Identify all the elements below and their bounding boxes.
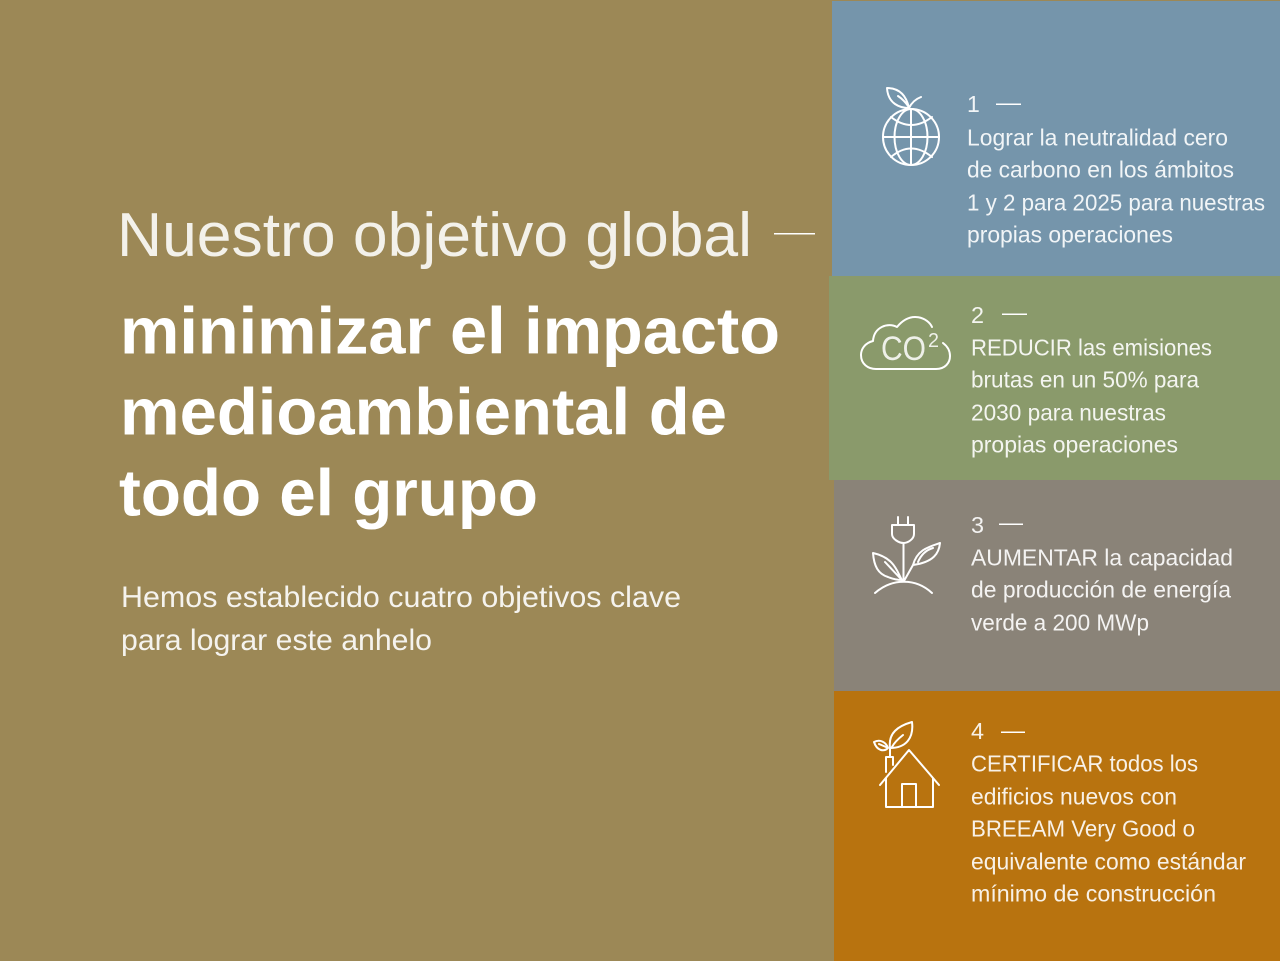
objective 2 text [971,334,1212,458]
text block: intro: para lograr este anhelo [121,624,432,657]
objective 3 text: de producción de energía [971,576,1231,602]
objective 2 number [971,302,1027,328]
text block: intro [121,581,681,657]
heading: Nuestro objetivo global: Nuestro objetivo global [117,201,752,270]
objective 1 text: propias operaciones [967,222,1173,248]
panel: objective 1 [832,1,1280,276]
objective 2 text: 2030 para nuestras [971,400,1166,426]
objective 1 text [967,124,1265,248]
panel: objective 2 [829,276,1280,480]
objective 1 number [967,91,1021,117]
objective 4 text [971,750,1246,906]
objective 3 text: verde a 200 MWp [971,610,1149,636]
objective 4 number: 4 [971,718,984,744]
objective 3 number [971,512,1023,538]
objective 4 text: BREEAM Very Good o [971,816,1195,842]
objective 4 text: equivalente como estándar [971,848,1246,874]
heading: main statement [119,294,780,530]
panel: objective 4 [834,691,1280,961]
objective 2 text: REDUCIR las emisiones [971,334,1212,360]
objective 1 text: Lograr la neutralidad cero [967,124,1228,150]
icon: CO2 cloud: 2 [928,330,939,352]
objective 3 text: AUMENTAR la capacidad [971,544,1233,570]
objective 2 number: 2 [971,302,984,328]
objective 3 text [971,544,1233,636]
objective 4 text: edificios nuevos con [971,784,1177,810]
heading: main statement: todo el grupo [119,456,538,530]
heading: main statement: minimizar el impacto [120,294,780,368]
icon: CO2 cloud: CO [881,330,926,368]
objective 2 text: brutas en un 50% para [971,366,1199,392]
icon: CO2 cloud [861,317,950,369]
objective 1 number: 1 [967,91,980,117]
icon: house with leaves [874,722,939,807]
objective 4 text: CERTIFICAR todos los [971,750,1198,776]
icon: globe with leaf [883,88,939,165]
icon: plug plant [873,517,940,593]
objective 2 text: propias operaciones [971,432,1178,458]
text block: intro: Hemos establecido cuatro objetivos clave [121,581,681,614]
objective 3 number: 3 [971,512,984,538]
objective 4 number [971,718,1025,744]
heading: main statement: medioambiental de [120,374,727,448]
objective 1 text: 1 y 2 para 2025 para nuestras [967,190,1265,216]
objective 4 text: mínimo de construcción [971,880,1216,906]
objective 1 text: de carbono en los ámbitos [967,156,1234,182]
panel: objective 3 [834,480,1280,691]
